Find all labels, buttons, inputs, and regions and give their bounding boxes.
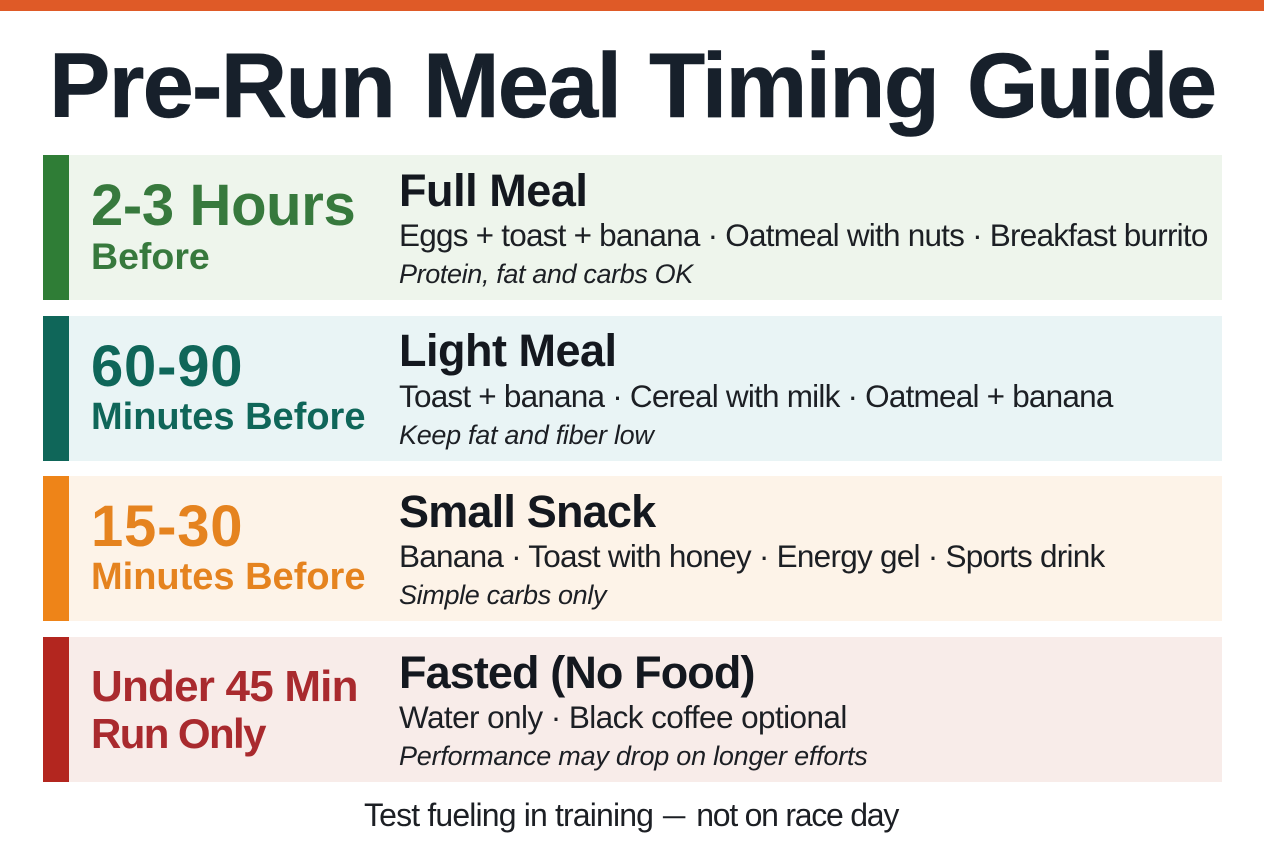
top accent band <box>0 0 1264 11</box>
timing: 60-90 minutes before: Minutes Before <box>91 396 365 438</box>
orange accent bar <box>43 476 69 621</box>
foods: light meal: Toast + banana · Cereal with milk · Oatmeal + banana <box>399 378 1113 414</box>
foods: full meal: Eggs + toast + banana · Oatmeal with nuts · Breakfast burrito <box>399 217 1208 253</box>
timing: 15-30 minutes before: 15-30 <box>91 494 243 559</box>
timing: 15-30 minutes before <box>91 494 365 598</box>
footer note: Test fueling in training — not on race day <box>364 797 898 833</box>
note: fasted: Performance may drop on longer efforts <box>399 741 868 771</box>
timing: 2-3 hours before: 2-3 Hours <box>91 173 355 238</box>
heading: full meal: Full Meal <box>399 165 587 216</box>
timing: 60-90 minutes before <box>91 334 365 438</box>
title: Pre-Run Meal Timing Guide <box>49 35 1215 137</box>
note: full meal: Protein, fat and carbs OK <box>399 259 693 289</box>
timing: 60-90 minutes before: 60-90 <box>91 334 243 399</box>
note: small snack: Simple carbs only <box>399 580 606 610</box>
heading: fasted: Fasted (No Food) <box>399 647 755 698</box>
panel: 60-90 minutes light meal <box>43 316 1222 461</box>
foods: fasted: Water only · Black coffee optional <box>399 699 847 735</box>
timing: 15-30 minutes before: Minutes Before <box>91 556 365 598</box>
timing: under 45 min run only: Run Only <box>91 710 265 757</box>
panel: under 45 min fasted <box>43 637 1222 782</box>
teal accent bar <box>43 316 69 461</box>
note: light meal: Keep fat and fiber low <box>399 420 654 450</box>
red accent bar <box>43 637 69 782</box>
green accent bar <box>43 155 69 300</box>
panel: 2-3 hours full meal <box>43 155 1222 300</box>
foods: small snack: Banana · Toast with honey · Energy gel · Sports drink <box>399 538 1105 574</box>
timing: under 45 min run only: Under 45 Min <box>91 662 358 711</box>
heading: small snack: Small Snack <box>399 486 655 537</box>
heading: light meal: Light Meal <box>399 325 616 376</box>
panel: 15-30 minutes small snack <box>43 476 1222 621</box>
timing: under 45 min run only <box>91 662 358 757</box>
timing: 2-3 hours before <box>91 173 355 277</box>
timing: 2-3 hours before: Before <box>91 235 210 277</box>
